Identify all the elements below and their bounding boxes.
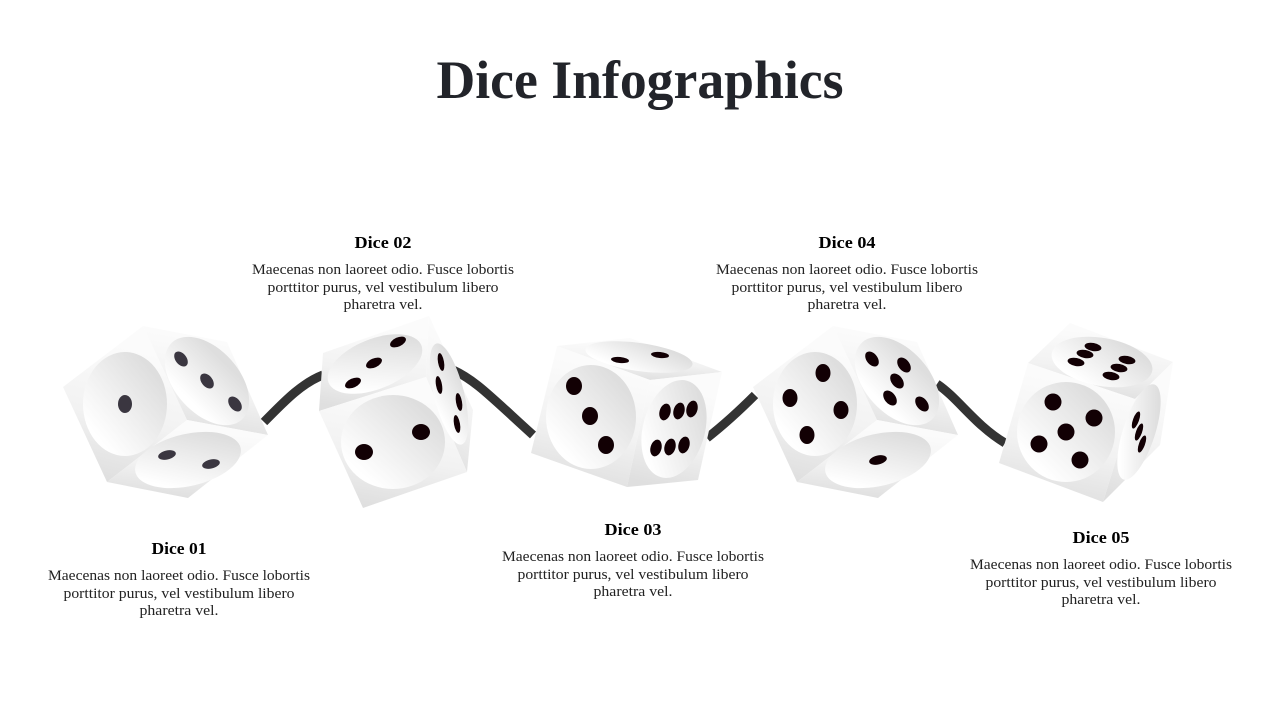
text block: Dice 05: Maecenas non laoreet odio. Fusce lobortis xyxy=(970,557,1232,573)
text block: Dice 01: Maecenas non laoreet odio. Fusce lobortis xyxy=(48,568,310,584)
text block: Dice 02: porttitor purus, vel vestibulum libero xyxy=(268,280,498,296)
text block: Dice 04: Maecenas non laoreet odio. Fusce lobortis xyxy=(716,262,978,278)
die 5 xyxy=(999,323,1173,502)
text block: Dice 02 xyxy=(252,233,514,313)
text block: Dice 04: porttitor purus, vel vestibulum libero xyxy=(732,280,962,296)
text block: Dice 04: pharetra vel. xyxy=(808,297,886,313)
text block: Dice 01 xyxy=(48,539,310,619)
text block: Dice 05: Dice 05 xyxy=(1072,528,1130,547)
connecting curve xyxy=(264,370,1005,443)
text block: Dice 03: pharetra vel. xyxy=(594,584,672,600)
text block: Dice 01: pharetra vel. xyxy=(140,603,218,619)
text block: Dice 03: Maecenas non laoreet odio. Fusce lobortis xyxy=(502,549,764,565)
text block: Dice 03: Dice 03 xyxy=(604,520,662,539)
text block: Dice 05: porttitor purus, vel vestibulum libero xyxy=(986,575,1216,591)
die 2 xyxy=(319,316,476,508)
text block: Dice 05: pharetra vel. xyxy=(1062,592,1140,608)
text block: Dice 04: Dice 04 xyxy=(818,233,876,252)
text block: Dice 04 xyxy=(716,233,978,313)
text block: Dice 02: Maecenas non laoreet odio. Fusce lobortis xyxy=(252,262,514,278)
text block: Dice 03: porttitor purus, vel vestibulum libero xyxy=(518,567,748,583)
text block: Dice 01: Dice 01 xyxy=(152,539,206,558)
text block: Dice 03 xyxy=(502,520,764,600)
title: Dice Infographics xyxy=(436,50,844,110)
text block: Dice 02: Dice 02 xyxy=(354,233,412,252)
die 3 xyxy=(531,336,722,487)
text block: Dice 02: pharetra vel. xyxy=(344,297,422,313)
die 1 xyxy=(63,321,268,498)
die 4 xyxy=(753,321,958,498)
text block: Dice 01: porttitor purus, vel vestibulum libero xyxy=(64,586,294,602)
text block: Dice 05 xyxy=(970,528,1232,608)
